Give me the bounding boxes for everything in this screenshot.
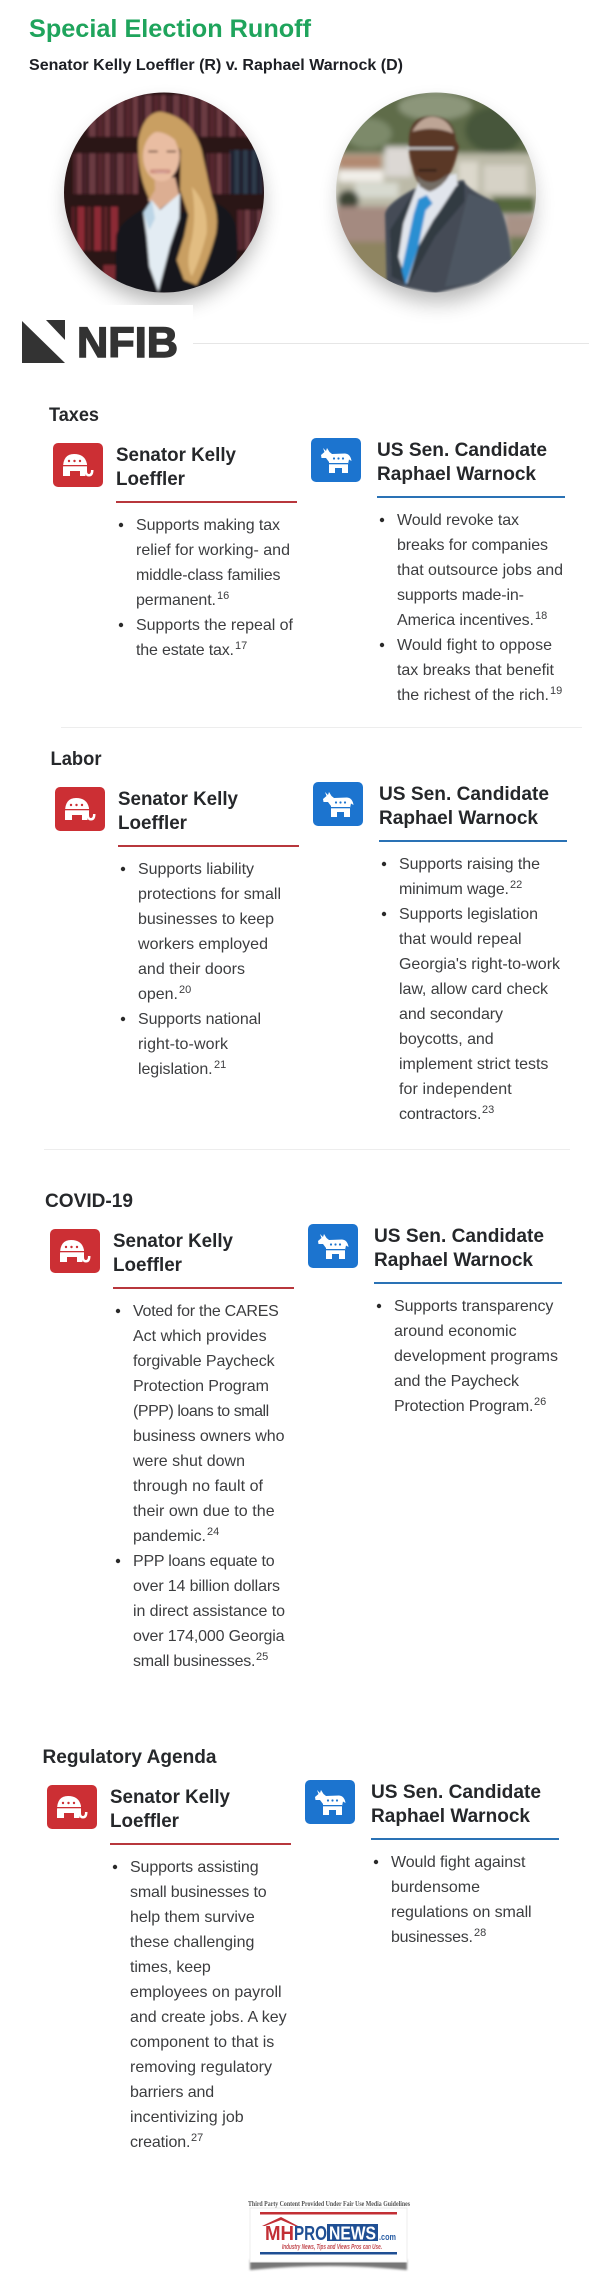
- bullet list: incentivizing job: [130, 2109, 244, 2126]
- candidate name: Senator Kelly: [116, 445, 236, 466]
- bullet list: boycotts, and: [399, 1031, 494, 1048]
- bullet list: protections for small: [138, 886, 281, 903]
- bullet list: 19: [550, 685, 562, 697]
- bullet list: [119, 517, 294, 659]
- panel: Labor: [50, 749, 567, 1123]
- bullet list: creation.: [130, 2134, 190, 2151]
- panel: Taxes: [49, 405, 565, 704]
- bullet list: permanent.: [136, 592, 216, 609]
- bullet list: Supports raising the: [399, 856, 540, 873]
- footer: fair use note: Third Party Content Provided Under Fair Use Media Guidelines: [248, 2199, 410, 2208]
- bullet list: Protection Program.: [394, 1398, 534, 1415]
- heading: Labor: [50, 749, 102, 770]
- logo: MHProNews: NEWS: [329, 2224, 376, 2244]
- candidate name: US Sen. Candidate: [379, 784, 549, 805]
- bullet list: 25: [256, 1651, 268, 1663]
- bullet list: their own due to the: [133, 1503, 275, 1520]
- panel: Regulatory Agenda: [42, 1747, 559, 2151]
- heading: Regulatory Agenda: [42, 1747, 217, 1768]
- bullet list: tax breaks that benefit: [397, 662, 555, 679]
- bullet list: relief for working- and: [136, 542, 290, 559]
- bullet list: middle-class families: [136, 567, 280, 584]
- candidate name: [116, 445, 236, 490]
- candidate name: [110, 1787, 230, 1832]
- bullet list: through no fault of: [133, 1478, 264, 1495]
- bullet list: over 14 billion dollars: [133, 1578, 280, 1595]
- logo: MHProNews: .com: [379, 2232, 396, 2242]
- candidate name: Loeffler: [118, 813, 188, 834]
- icon: Republican elephant: [55, 787, 105, 831]
- bullet list: pandemic.: [133, 1528, 206, 1545]
- bullet list: times, keep: [130, 1959, 211, 1976]
- bullet list: legislation.: [138, 1061, 213, 1078]
- candidate name: [113, 1231, 233, 1276]
- bullet list: 27: [191, 2132, 203, 2144]
- bullet list: 20: [179, 984, 191, 996]
- candidate name: US Sen. Candidate: [374, 1226, 544, 1247]
- icon: Democratic donkey: [313, 782, 363, 826]
- bullet list: 26: [534, 1396, 546, 1408]
- bullet list: removing regulatory: [130, 2059, 272, 2076]
- bullet list: 16: [217, 590, 229, 602]
- bullet list: 21: [214, 1059, 226, 1071]
- icon: Republican elephant: [47, 1785, 97, 1829]
- bullet list: the richest of the rich.: [397, 687, 549, 704]
- bullet list: America incentives.: [397, 612, 534, 629]
- bullet list: 23: [482, 1104, 494, 1116]
- candidate name: Senator Kelly: [118, 789, 238, 810]
- column: Loeffler: [55, 787, 299, 1078]
- column: Warnock: [311, 438, 565, 704]
- column: Loeffler: [50, 1229, 294, 1670]
- logo: MHProNews: Industry News, Tips and Views Pros can Use.: [282, 2244, 382, 2251]
- bullet list: businesses.: [391, 1929, 473, 1946]
- bullet list: Would fight to oppose: [397, 637, 552, 654]
- bullet list: workers employed: [137, 936, 268, 953]
- bullet list: Supports liability: [138, 861, 254, 878]
- candidate name: [118, 789, 238, 834]
- bullet list: supports made-in-: [397, 587, 524, 604]
- bullet list: law, allow card check: [399, 981, 549, 998]
- heading: COVID-19: [45, 1191, 133, 1212]
- subtitle: Senator Kelly Loeffler (R) v. Raphael Warnock (D): [29, 57, 403, 74]
- candidate name: Raphael Warnock: [377, 464, 536, 485]
- bullet list: and the Paycheck: [394, 1373, 520, 1390]
- bullet list: Supports legislation: [399, 906, 538, 923]
- candidate name: [371, 1782, 541, 1827]
- icon: Republican elephant: [50, 1229, 100, 1273]
- bullet list: (PPP) loans to small: [133, 1403, 269, 1420]
- panel: COVID-19: [45, 1191, 562, 1670]
- bullet list: Would revoke tax: [397, 512, 519, 529]
- bullet list: these challenging: [130, 1934, 254, 1951]
- bullet list: Act which provides: [133, 1328, 267, 1345]
- bullet list: Protection Program: [133, 1378, 269, 1395]
- bullet list: [113, 1859, 287, 2151]
- photo: Raphael Warnock: [335, 90, 545, 302]
- bullet list: 18: [535, 610, 547, 622]
- bullet list: implement strict tests: [399, 1056, 548, 1073]
- bullet list: help them survive: [130, 1909, 255, 1926]
- column: Warnock: [308, 1224, 562, 1415]
- bullet list: breaks for companies: [397, 537, 548, 554]
- icon: Republican elephant: [53, 443, 103, 487]
- bullet list: employees on payroll: [130, 1984, 282, 2001]
- column: Warnock: [305, 1780, 559, 1946]
- bullet list: [121, 861, 281, 1078]
- bullet list: right-to-work: [138, 1036, 229, 1053]
- bullet list: contractors.: [399, 1106, 481, 1123]
- bullet list: 24: [207, 1526, 219, 1538]
- bullet list: and their doors: [138, 961, 245, 978]
- bullet list: and secondary: [399, 1006, 503, 1023]
- bullet list: PPP loans equate to: [133, 1553, 275, 1570]
- bullet list: minimum wage.: [399, 881, 509, 898]
- candidate name: [374, 1226, 544, 1271]
- candidate name: US Sen. Candidate: [371, 1782, 541, 1803]
- candidate name: Loeffler: [110, 1811, 180, 1832]
- bullet list: were shut down: [132, 1453, 245, 1470]
- candidate name: Loeffler: [113, 1255, 183, 1276]
- icon: Democratic donkey: [311, 438, 361, 482]
- bullet list: barriers and: [130, 2084, 214, 2101]
- bullet list: Supports making tax: [136, 517, 280, 534]
- candidate name: Raphael Warnock: [374, 1250, 533, 1271]
- candidate name: Raphael Warnock: [371, 1806, 530, 1827]
- bullet list: [116, 1303, 285, 1670]
- bullet list: for independent: [399, 1081, 512, 1098]
- bullet list: and create jobs. A key: [130, 2009, 287, 2026]
- NFIB wordmark: NFIB: [77, 319, 178, 367]
- bullet list: [374, 1854, 532, 1946]
- bullet list: Voted for the CARES: [133, 1303, 279, 1320]
- bullet list: that outsource jobs and: [397, 562, 563, 579]
- bullet list: 22: [510, 879, 522, 891]
- bullet list: over 174,000 Georgia: [133, 1628, 285, 1645]
- bullet list: Supports transparency: [394, 1298, 553, 1315]
- bullet list: Supports the repeal of: [136, 617, 294, 634]
- bullet list: component to that is: [130, 2034, 274, 2051]
- bullet list: Supports national: [138, 1011, 261, 1028]
- bullet list: the estate tax.: [136, 642, 234, 659]
- candidate name: Senator Kelly: [110, 1787, 230, 1808]
- candidate name: Loeffler: [116, 469, 186, 490]
- bullet list: development programs: [394, 1348, 558, 1365]
- bullet list: business owners who: [133, 1428, 285, 1445]
- bullet list: 28: [474, 1927, 486, 1939]
- bullet list: that would repeal: [399, 931, 522, 948]
- icon: Democratic donkey: [305, 1780, 355, 1824]
- bullet list: [377, 1298, 558, 1415]
- candidate name: [379, 784, 549, 829]
- candidate name: Senator Kelly: [113, 1231, 233, 1252]
- icon: Democratic donkey: [308, 1224, 358, 1268]
- bullet list: open.: [138, 986, 178, 1003]
- bullet list: [382, 856, 561, 1123]
- bullet list: Would fight against: [391, 1854, 526, 1871]
- heading: Taxes: [49, 405, 99, 426]
- bullet list: small businesses.: [133, 1653, 256, 1670]
- bullet list: in direct assistance to: [133, 1603, 285, 1620]
- bullet list: businesses to keep: [138, 911, 274, 928]
- candidate name: Raphael Warnock: [379, 808, 538, 829]
- bullet list: [380, 512, 563, 704]
- bullet list: regulations on small: [391, 1904, 532, 1921]
- bullet list: forgivable Paycheck: [133, 1353, 276, 1370]
- bullet list: 17: [235, 640, 247, 652]
- title: Special Election Runoff: [29, 15, 312, 43]
- logo: MHProNews: MH: [265, 2223, 294, 2245]
- logo: MHProNews: [250, 2208, 407, 2270]
- bullet list: burdensome: [391, 1879, 480, 1896]
- column: Warnock: [313, 782, 567, 1123]
- bullet list: around economic: [394, 1323, 517, 1340]
- candidate name: [377, 440, 547, 485]
- logo: NFIB: [22, 319, 178, 367]
- bullet list: Supports assisting: [130, 1859, 259, 1876]
- column: Loeffler: [53, 443, 297, 659]
- icon: NFIB mark: [22, 320, 65, 363]
- column: Loeffler: [47, 1785, 291, 2151]
- bullet list: Georgia's right-to-work: [399, 956, 561, 973]
- logo: MHProNews: PRO: [294, 2223, 327, 2245]
- bullet list: small businesses to: [130, 1884, 267, 1901]
- photo: Kelly Loeffler: [60, 90, 270, 302]
- candidate name: US Sen. Candidate: [377, 440, 547, 461]
